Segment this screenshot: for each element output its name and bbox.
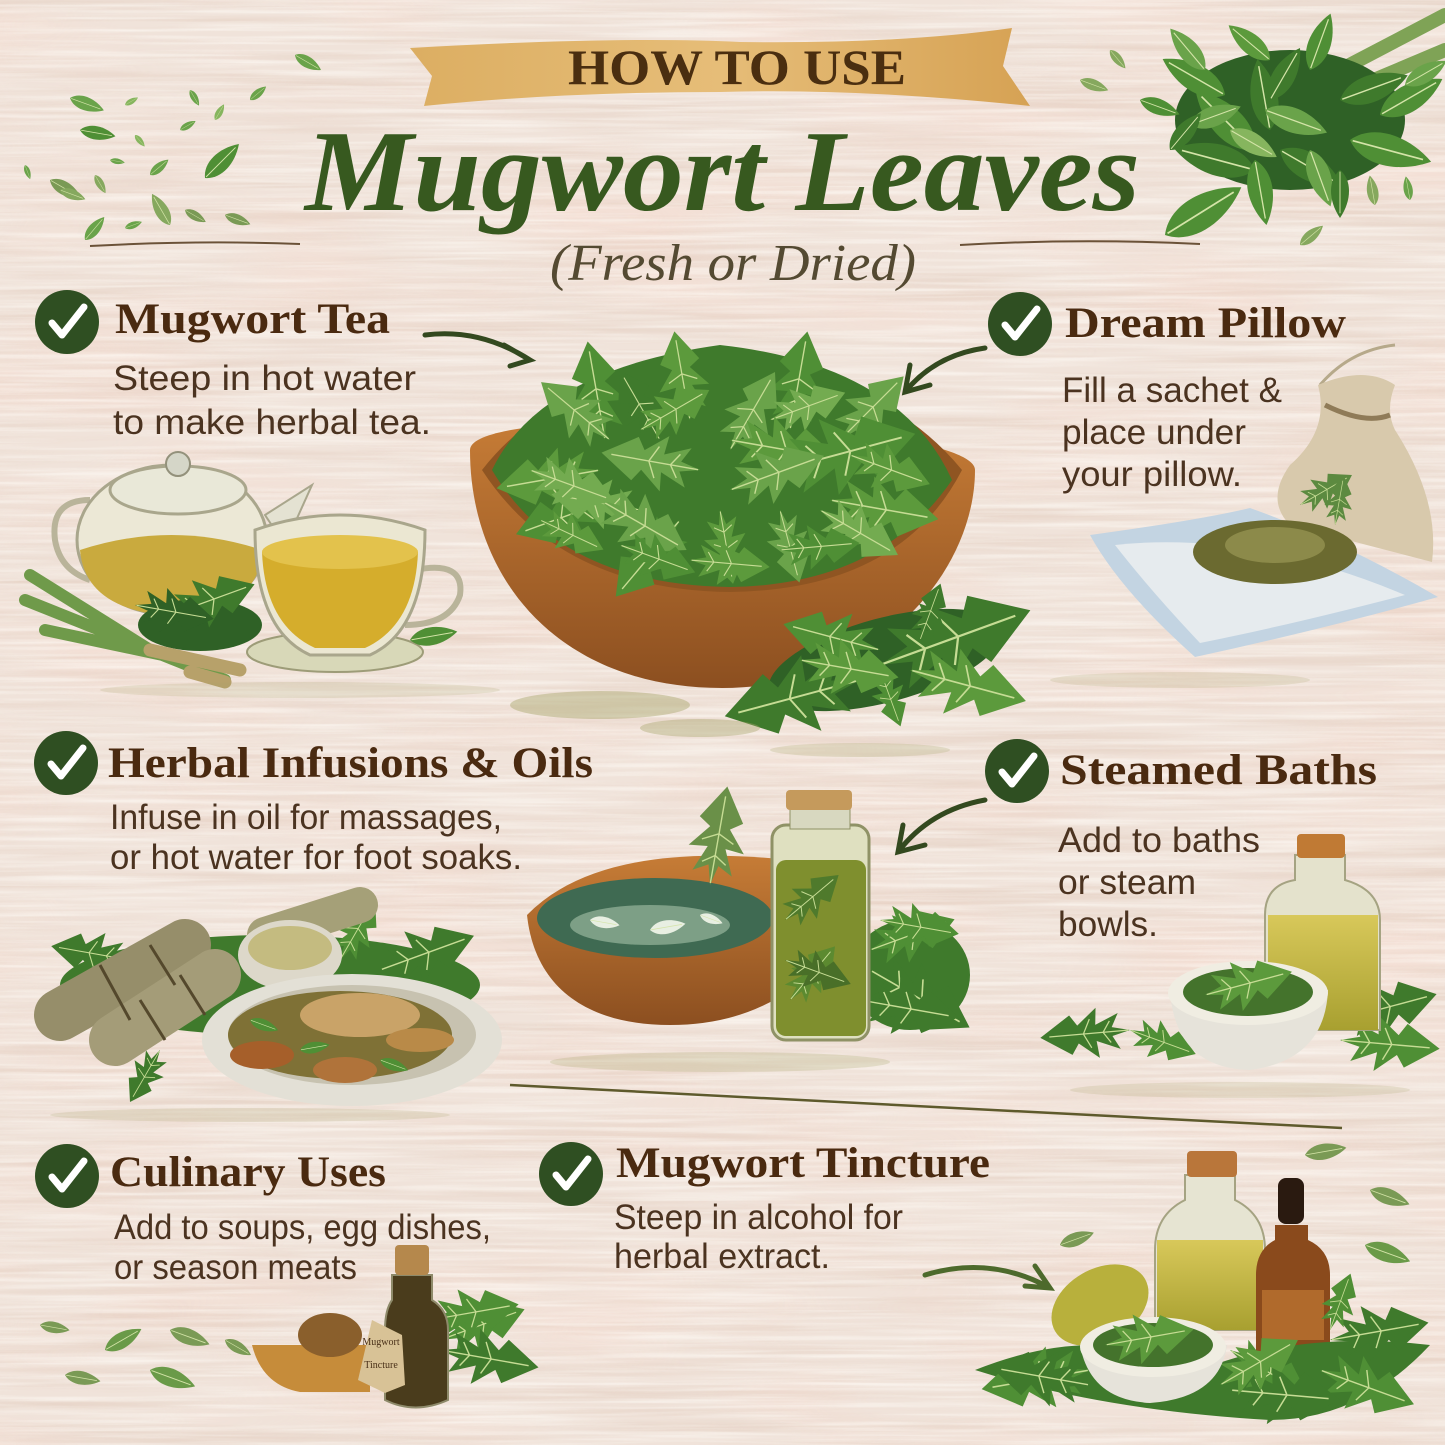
illustration: bottle, wood scoop, leaves: Mugwort <box>362 1337 400 1348</box>
description: herbal extract. <box>614 1237 830 1276</box>
description: Add to soups, egg dishes, <box>114 1208 491 1247</box>
check icon <box>985 739 1049 803</box>
title: Mugwort Leaves <box>303 108 1140 236</box>
banner text: how to use: HOW TO USE <box>568 39 906 95</box>
description: to make herbal tea. <box>113 403 431 442</box>
arrow <box>898 800 985 852</box>
heading: Culinary Uses <box>110 1149 386 1196</box>
crumbs under central bowl <box>50 672 1410 1122</box>
illustration: tincture bottles and bowl <box>975 1140 1433 1431</box>
leaf pile <box>491 327 952 615</box>
description: Add to baths <box>1058 821 1260 860</box>
section: mugwort tincture <box>539 1140 1433 1431</box>
heading: Steamed Baths <box>1060 747 1377 794</box>
description: bowls. <box>1058 905 1158 944</box>
central bowl of leaves <box>470 327 1046 754</box>
check icon <box>988 292 1052 356</box>
check icon <box>35 290 99 354</box>
illustration: sachet and pillow <box>1090 345 1438 657</box>
description: Steep in alcohol for <box>614 1198 903 1237</box>
heading: Dream Pillow <box>1065 300 1346 347</box>
illustration: bottle, wood scoop, leaves: Tincture <box>364 1360 398 1371</box>
description: your pillow. <box>1062 455 1242 494</box>
subtitle: (Fresh or Dried) <box>550 235 916 292</box>
description: or steam <box>1058 863 1196 902</box>
description: place under <box>1062 413 1246 452</box>
banner <box>410 28 1030 106</box>
illustration: smudge sticks and plate <box>47 890 502 1110</box>
leaf sprig beside bowl <box>715 568 1046 754</box>
description: Fill a sachet & <box>1062 371 1282 410</box>
section: mugwort tea <box>25 290 530 682</box>
heading: Mugwort Tincture <box>616 1140 990 1187</box>
description: or hot water for foot soaks. <box>110 838 522 877</box>
arrow <box>925 1266 1050 1288</box>
leaf cluster: top right <box>1078 10 1445 249</box>
check icon <box>539 1142 603 1206</box>
description: Infuse in oil for massages, <box>110 798 502 837</box>
section: herbal infusions and oils <box>34 731 986 1110</box>
scattered leaves: top left <box>22 50 324 244</box>
check icon <box>35 1144 99 1208</box>
heading: Mugwort Tea <box>115 296 390 343</box>
illustration: oil bottle and white bowl <box>1038 834 1444 1077</box>
section: dream pillow <box>905 292 1438 657</box>
illustration: teapot and cup <box>25 452 460 682</box>
arrow <box>425 334 530 366</box>
check icon <box>34 731 98 795</box>
heading: Herbal Infusions & Oils <box>108 740 593 787</box>
description: or season meats <box>114 1248 357 1287</box>
illustration: bottle, wood scoop, leaves <box>39 1245 543 1408</box>
arrow <box>905 348 985 392</box>
description: Steep in hot water <box>113 359 416 398</box>
illustration: steaming bowl and jar <box>527 782 986 1055</box>
section: culinary uses <box>35 1144 543 1408</box>
section: steamed baths <box>898 739 1444 1077</box>
